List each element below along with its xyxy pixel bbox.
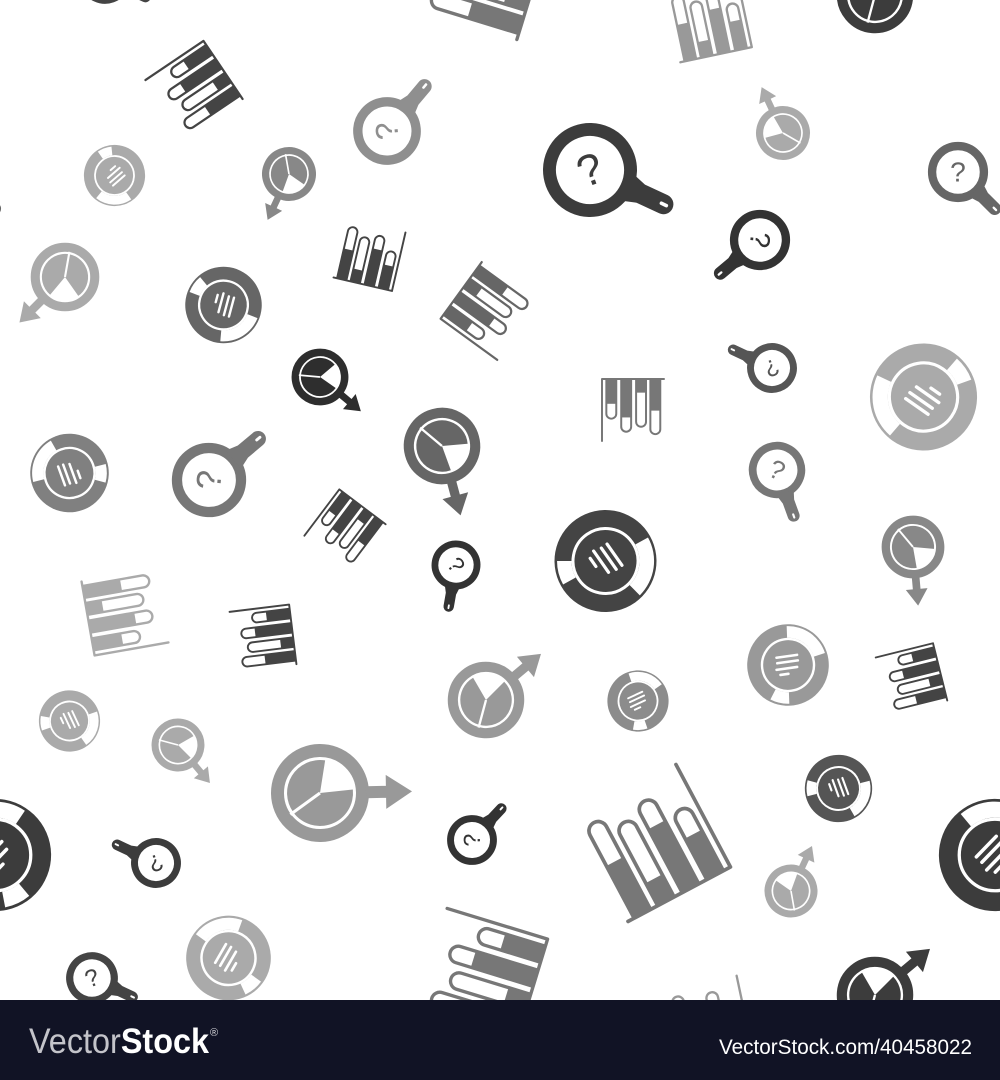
icon: dark pie with arrow wrapped at top: [828, 0, 951, 42]
icon: question magnifier top right: ?: [950, 157, 966, 188]
image id url: VectorStock.com/40458022: [719, 1036, 972, 1059]
icon: light bar chart left: [82, 569, 168, 655]
icon: large light donut chart: [849, 322, 998, 472]
icon: bar chart upper centre: [334, 219, 405, 291]
icon: large question magnifier: [538, 106, 686, 254]
icon: dark donut chart cut at left edge: [0, 776, 74, 934]
icon: dark donut chart cut at right edge: [916, 776, 1000, 934]
icon: small pie with arrow lower left: [146, 713, 228, 798]
icon: light donut chart top left: [71, 132, 158, 219]
icon: bar chart centre: [441, 262, 538, 360]
icon: hanging bar chart: [602, 379, 664, 441]
icon: question magnifier right of centre: [708, 210, 788, 290]
icon: question magnifier wrapped at left edge: [0, 146, 6, 220]
icon: inverted question magnifier lower left: [105, 818, 184, 897]
icon: inverted question magnifier: ?: [761, 354, 783, 382]
registered mark: ®: [210, 1027, 218, 1039]
icon: pie with arrow centre: [401, 405, 493, 524]
icon: horizontal bar chart: [230, 605, 296, 671]
icon: pie with arrow lower centre: [439, 628, 562, 747]
icon: large dark donut chart: [534, 490, 677, 632]
icon: horizontal bar chart right: [876, 643, 947, 715]
icon: question magnifier right of centre: ?: [744, 231, 776, 249]
icon: large bar chart: [574, 765, 730, 921]
icon: light donut chart bottom: [171, 900, 286, 1016]
VectorStock logo: VectorStock: [29, 1022, 209, 1061]
icon: bar chart top left: [145, 41, 243, 138]
icon: large question magnifier: ?: [570, 143, 610, 198]
icon: question magnifier upper centre: [353, 73, 443, 163]
icon: bar chart wrapped at bottom right: [665, 976, 752, 1062]
icon: question magnifier with handle down: ?: [764, 453, 790, 487]
icon: light donut chart lower left: [29, 680, 110, 762]
icon: donut chart lower right: [742, 619, 834, 711]
icon: small donut chart: [597, 660, 679, 742]
icon: question magnifier mid left: [174, 418, 273, 517]
icon: pie with arrow top right: [740, 77, 814, 164]
icon: large pie with arrow: [277, 749, 413, 836]
icon: question magnifier centre: [412, 536, 496, 619]
icon: question magnifier with handle down: [736, 438, 828, 530]
icon: donut chart mid left: [19, 423, 120, 523]
icon: dark pie with arrow: [285, 342, 377, 430]
icon: dark small donut chart: [795, 745, 882, 832]
icon: question magnifier bottom left: ?: [81, 964, 103, 994]
icon: donut chart upper left: [177, 258, 270, 352]
icon: light pie with arrow left: [0, 235, 107, 344]
icon: small pie with arrow lower right: [761, 836, 833, 921]
icon: question magnifier bottom left: [63, 943, 145, 1024]
icon: question magnifier lower centre: [449, 799, 512, 862]
icon: bar chart top right: [665, 0, 752, 62]
icon: bar chart left of centre: [304, 489, 386, 571]
icon: dark pie with arrow at bottom: [828, 923, 951, 1042]
icon: bar chart at bottom: [416, 908, 548, 1040]
icon: inverted question magnifier: [721, 323, 800, 402]
icon: pie with arrow right: [884, 518, 945, 608]
icon: question magnifier centre: ?: [442, 552, 470, 578]
icon: pie with arrow upper left: [246, 143, 320, 230]
icon: bar chart wrapped at top centre: [416, 0, 548, 40]
icon: question magnifier top right: [932, 146, 1000, 220]
footer bar: [0, 1000, 1000, 1080]
icon: question magnifier wrapped at top: [76, 0, 158, 24]
icon: inverted question magnifier lower left: ?: [145, 849, 167, 877]
icon: question magnifier lower centre: ?: [459, 833, 485, 847]
icon: question magnifier mid left: ?: [190, 469, 230, 491]
icon: question magnifier upper centre: ?: [368, 121, 405, 141]
